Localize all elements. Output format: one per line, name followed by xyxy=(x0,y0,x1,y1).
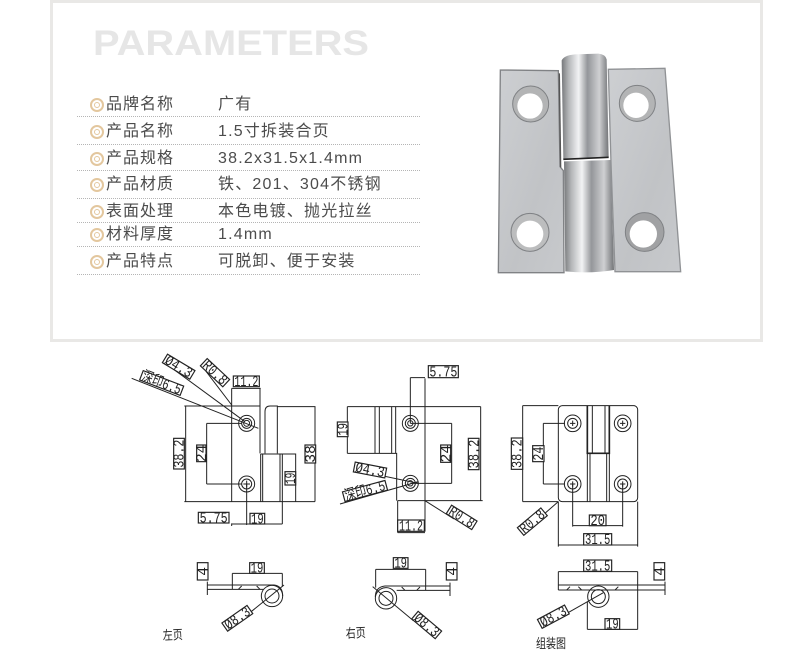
dimension labels: 5.75 xyxy=(200,511,228,527)
dimension labels: Ø8.3 xyxy=(222,605,254,634)
holes xyxy=(402,415,418,491)
dimension labels: 38.2 xyxy=(511,439,527,468)
dimension labels xyxy=(393,557,461,642)
right leaf xyxy=(608,68,681,272)
drawing: assembled side view xyxy=(537,559,669,634)
dimension labels: 24 xyxy=(532,447,548,461)
dimension labels: 38.2 xyxy=(467,440,483,468)
row: product name: 产品名称 xyxy=(106,123,174,140)
dimension labels: R0.8 xyxy=(198,358,230,389)
dimension labels: 24 xyxy=(195,444,211,462)
dimension labels xyxy=(336,365,483,535)
upper barrel xyxy=(562,54,609,159)
drawing: right leaf side view xyxy=(373,557,461,642)
dimension labels: 19 xyxy=(284,473,300,484)
panel: parameters frame xyxy=(50,0,763,342)
dimension labels: 19 xyxy=(251,562,263,578)
lower barrel xyxy=(564,160,614,272)
row: brand name: 品牌名称 xyxy=(106,96,174,113)
row: product size: 38.2x31.5x1.4mm xyxy=(218,150,363,167)
screw holes xyxy=(511,85,664,251)
caption: left leaf: 左页 xyxy=(162,626,183,644)
dimension labels: 深印6.5 xyxy=(139,368,184,399)
dimension labels: 深印6.5 xyxy=(343,477,387,505)
dimension labels: Ø4.3 xyxy=(354,461,386,482)
dimension labels: 31.5 xyxy=(585,533,610,549)
drawing: left leaf front view xyxy=(132,353,320,528)
dimension labels: 24 xyxy=(439,445,455,462)
row: product name xyxy=(90,122,330,140)
row: product size xyxy=(90,149,363,167)
row: material thickness: 材料厚度 xyxy=(106,226,174,243)
holes xyxy=(564,415,631,492)
row: product size: 产品规格 xyxy=(106,150,174,167)
row: product features: 可脱卸、便于安装 xyxy=(218,253,356,270)
dimension labels: 38.2 xyxy=(173,440,189,468)
product photo: hinge xyxy=(498,54,681,273)
dimension labels: Ø8.3 xyxy=(410,611,442,641)
dimension labels: Ø4.3 xyxy=(161,353,195,382)
row: product material: 铁、201、304不锈钢 xyxy=(218,176,382,193)
drawing: right leaf front view xyxy=(336,365,483,535)
dimension labels: 20 xyxy=(590,514,605,530)
drawing: left leaf side view xyxy=(196,562,284,635)
dimension labels xyxy=(511,438,612,549)
row: surface treatment xyxy=(90,202,373,220)
dimension labels: 11.2 xyxy=(234,375,258,391)
dimension labels xyxy=(196,562,264,635)
row: brand name xyxy=(90,95,252,113)
row: product features: 产品特点 xyxy=(106,253,174,270)
row: product material: 产品材质 xyxy=(106,176,174,193)
row: surface treatment: 本色电镀、抛光拉丝 xyxy=(218,203,373,220)
dimension labels: R0.8 xyxy=(517,508,549,538)
dimension labels: 38 xyxy=(304,445,320,463)
dimension labels: Ø8.3 xyxy=(538,604,570,631)
caption: right leaf: 右页 xyxy=(345,624,366,642)
dimension labels: 19 xyxy=(606,618,619,634)
dimension labels xyxy=(537,559,669,634)
title: PARAMETERS: PARAMETERS xyxy=(93,24,369,63)
row: material thickness: 1.4mm xyxy=(218,226,273,243)
dimension labels: 4 xyxy=(445,567,461,576)
drawing: assembled front view xyxy=(511,406,638,549)
dimension labels: 4 xyxy=(653,567,669,576)
dimension labels xyxy=(138,353,320,528)
dimension labels: 4 xyxy=(196,567,212,576)
left leaf xyxy=(498,70,564,273)
dimension labels: 19 xyxy=(394,557,407,573)
row: product name: 1.5寸拆装合页 xyxy=(218,123,330,140)
holes xyxy=(239,415,255,492)
dimension labels: 11.2 xyxy=(399,519,423,535)
row: product material xyxy=(90,175,382,193)
row: surface treatment: 表面处理 xyxy=(106,203,174,220)
caption: assembly: 组装图 xyxy=(536,635,566,652)
dimension labels: 19 xyxy=(336,423,352,436)
dimension labels: 5.75 xyxy=(429,365,457,381)
row: material thickness xyxy=(90,225,273,243)
dimension labels: R0.8 xyxy=(445,504,477,532)
row: product features xyxy=(90,252,356,270)
row: brand name: 广有 xyxy=(218,96,252,113)
dimension labels: 19 xyxy=(251,512,264,528)
dimension labels: 31.5 xyxy=(585,559,610,575)
